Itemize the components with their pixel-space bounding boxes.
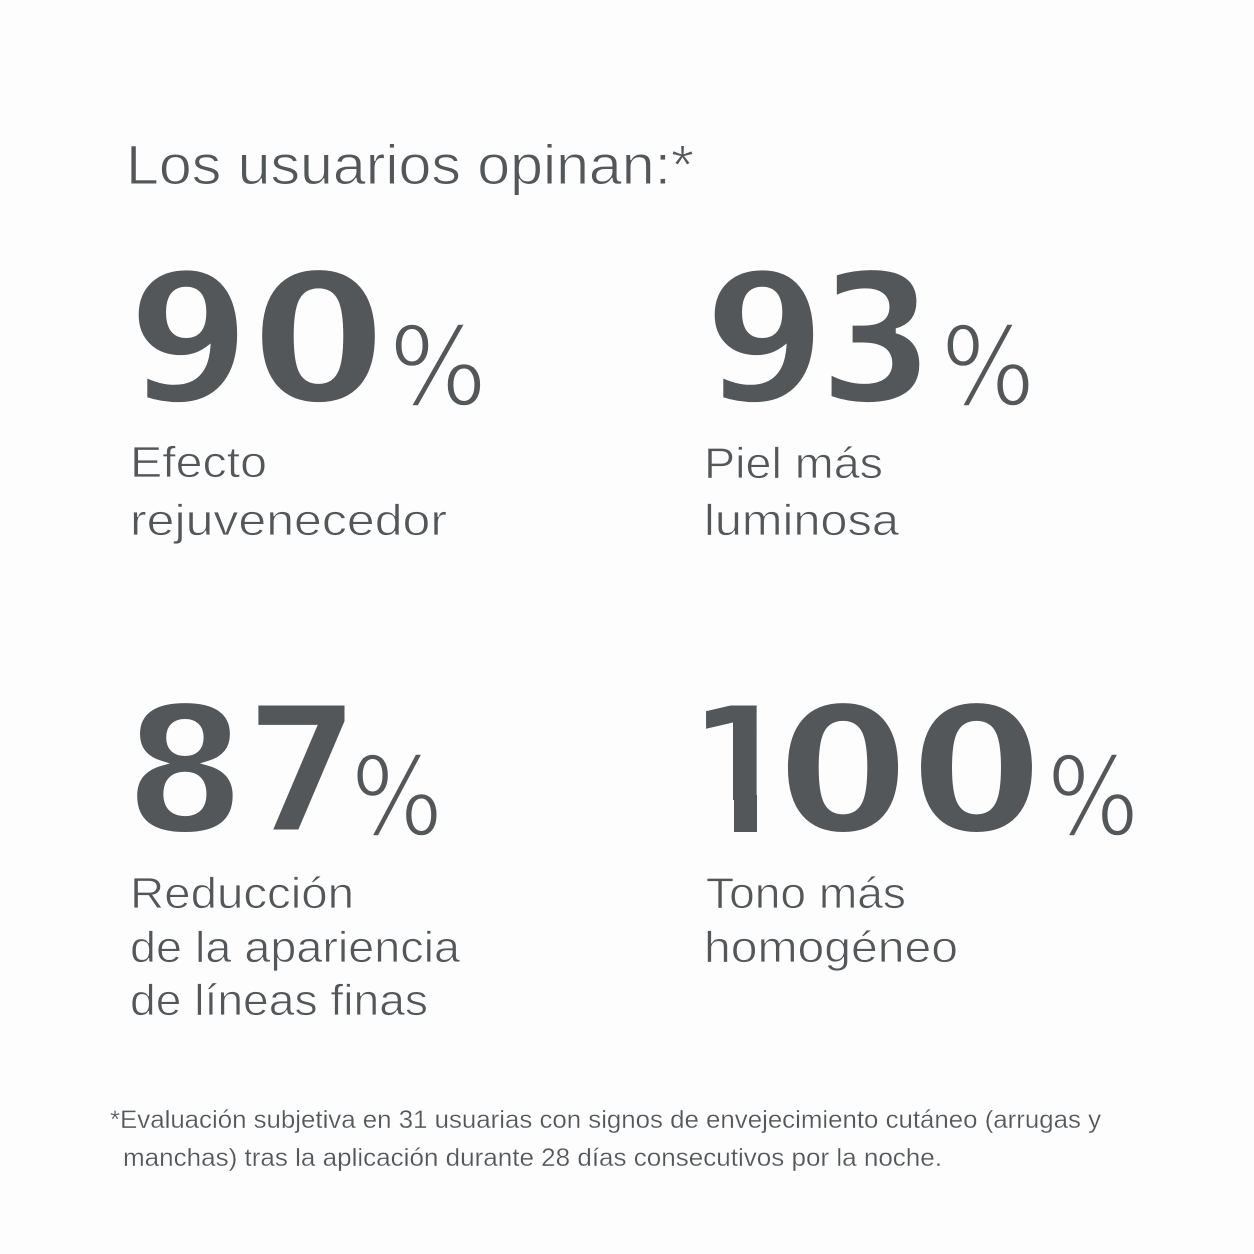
footnote: *Evaluación subjetiva en 31 usuarias con signos de envejecimiento cutáneo (arrugas y — [110, 1106, 1102, 1134]
panel: stat 87% reducción de líneas finas — [124, 668, 461, 1025]
label: reducción de la apariencia de líneas finas: de la apariencia — [130, 923, 461, 972]
label: reducción de la apariencia de líneas finas — [130, 869, 461, 1025]
label: efecto rejuvenecedor — [130, 438, 447, 545]
title: Los usuarios opinan:* — [126, 133, 694, 196]
number: 93: 3 — [818, 234, 935, 445]
number: 90 — [127, 234, 387, 445]
number: 100 — [680, 668, 1044, 874]
label: piel más luminosa: luminosa — [704, 496, 900, 545]
percent sign: % — [389, 303, 487, 431]
label: tono más homogéneo: Tono más — [706, 869, 906, 918]
number: 93 — [703, 234, 935, 445]
label: tono más homogéneo: homogéneo — [704, 923, 958, 972]
number: 87: 8 — [124, 668, 246, 874]
label: efecto rejuvenecedor: rejuvenecedor — [130, 496, 447, 545]
number: 87 — [124, 668, 360, 874]
number: 87: 7 — [245, 668, 360, 874]
panel: stat 100% tono más homogéneo — [680, 668, 1139, 972]
label: piel más luminosa: Piel más — [704, 439, 883, 488]
number: 100: 0 — [776, 668, 910, 874]
label: reducción de la apariencia de líneas finas: Reducción — [130, 869, 354, 918]
percent sign: % — [941, 303, 1035, 431]
footnote — [110, 1106, 1102, 1172]
label: efecto rejuvenecedor: Efecto — [130, 438, 267, 487]
number: 90: 0 — [250, 234, 387, 445]
label: tono más homogéneo — [704, 869, 958, 972]
footnote: manchas) tras la aplicación durante 28 días consecutivos por la noche. — [123, 1144, 942, 1172]
number: 90: 9 — [127, 234, 251, 445]
number: 100: 0 — [909, 668, 1044, 874]
number: 100: 1 — [686, 668, 796, 874]
label: piel más luminosa — [704, 439, 900, 545]
percent sign: % — [351, 733, 443, 861]
number: 93: 9 — [703, 234, 827, 445]
label: reducción de la apariencia de líneas finas: de líneas finas — [130, 976, 428, 1025]
panel: stat 90% efecto rejuvenecedor — [127, 234, 487, 545]
panel: stat 93% piel más luminosa — [703, 234, 1035, 545]
percent sign: % — [1047, 733, 1139, 861]
